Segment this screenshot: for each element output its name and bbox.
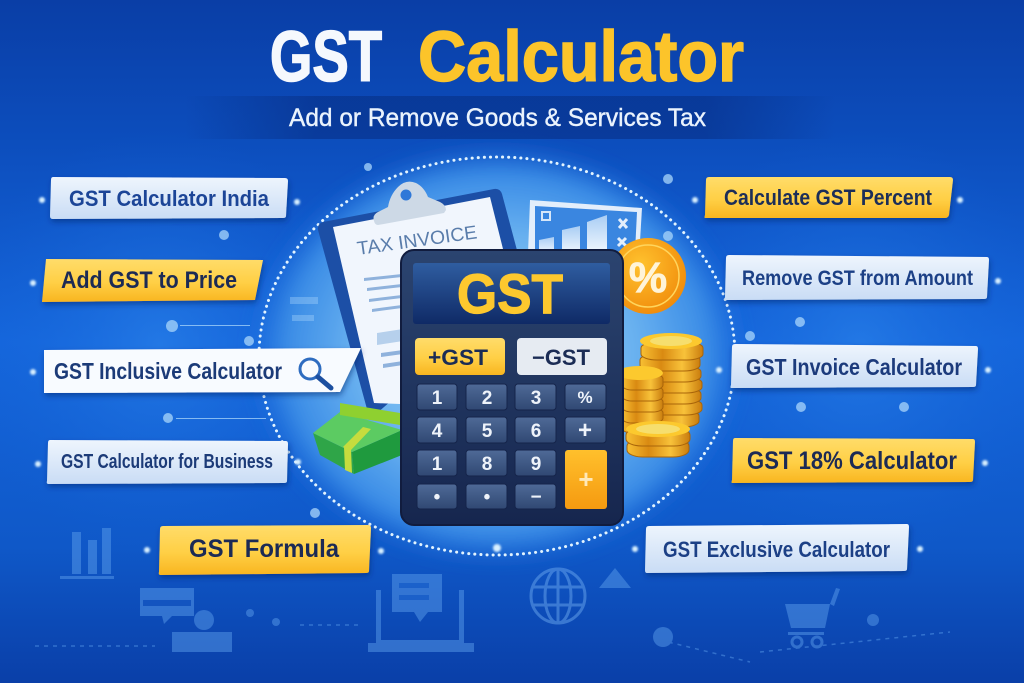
decorative nodes [163,163,909,518]
top bundle [340,403,400,425]
dotted ring [259,157,735,555]
invoice lines [364,274,403,368]
icon: laptop with chat [368,574,474,652]
title: GST [270,18,382,97]
keypad: • [484,487,491,508]
display: GST [457,262,563,325]
label: GST Formula: GST Formula [189,535,340,563]
label: Remove GST from Amount [725,255,989,300]
icon: card and envelope [140,588,232,652]
keypad: 6 [531,421,541,442]
icon: percent coin: % [629,254,667,302]
icon: bar chart [60,528,114,579]
right face [352,430,402,474]
label: GST 18% Calculator: GST 18% Calculator [747,447,957,475]
invoice paper [333,197,525,407]
label: Add GST to Price: Add GST to Price [61,267,237,294]
keypad: − [530,487,542,508]
label: GST Inclusive Calculator [44,348,361,393]
bottom faint icons [35,528,950,662]
button: remove gst: −GST [532,345,591,370]
icon: shopping cart [785,588,840,647]
icon: coin stacks [617,333,703,457]
label: GST Exclusive Calculator: GST Exclusive Calculator [663,537,890,562]
label: Remove GST from Amount: Remove GST from Amount [742,267,973,290]
label: GST Calculator for Business [47,440,288,484]
label: GST 18% Calculator [732,438,975,483]
keypad: + [578,464,594,494]
keypad [417,384,607,509]
calculator [401,250,623,525]
keypad: 3 [531,388,541,409]
button: add gst [415,338,505,375]
title [270,18,744,97]
lone stack [626,428,690,457]
label: GST Invoice Calculator [730,344,978,388]
keypad: 1 [432,454,443,475]
label: GST Formula [159,525,371,575]
front stack [622,374,663,433]
keypad: 5 [482,421,493,442]
keypad: 1 [432,388,443,409]
keypad: 4 [432,421,443,442]
label: Calculate GST Percent: Calculate GST Percent [724,185,933,210]
clipboard board [318,189,526,420]
calculator body [401,250,623,525]
keypad: 9 [531,454,541,475]
rear stack [640,342,703,427]
icon: percent coin [610,238,686,314]
title band [185,96,835,139]
keypad: % [577,388,593,407]
yellow band [343,427,371,473]
clip [374,182,446,225]
label: GST Inclusive Calculator: GST Inclusive Calculator [54,358,282,384]
icon: globe [531,569,585,623]
subtitle: Add or Remove Goods & Services Tax [289,104,706,132]
icon: magnifier [300,359,331,388]
side dots [30,197,1001,554]
label: Add GST to Price [42,259,263,302]
central glow circle [247,142,747,566]
clipboard with tax invoice [318,182,526,420]
keypad: 8 [482,454,492,475]
label: GST Calculator India [50,177,288,219]
icon: triangle [599,568,631,588]
top face [313,412,402,452]
display [413,262,610,325]
label: GST Calculator for Business: GST Calculator for Business [61,451,273,473]
button: remove gst [517,338,607,375]
button: add gst: +GST [428,345,489,370]
label: GST Calculator India: GST Calculator India [69,186,270,211]
keypad: 2 [482,388,492,409]
label: GST Invoice Calculator: GST Invoice Calculator [746,354,962,380]
label: GST Exclusive Calculator [645,524,909,573]
keypad: + [578,417,592,444]
label tax invoice: TAX INVOICE [356,222,479,260]
keypad: • [434,487,441,508]
chart card [528,200,642,258]
label: Calculate GST Percent [704,177,953,218]
title: Calculator [418,18,744,97]
left face [313,433,354,474]
icon: green cash bundle [313,403,402,474]
